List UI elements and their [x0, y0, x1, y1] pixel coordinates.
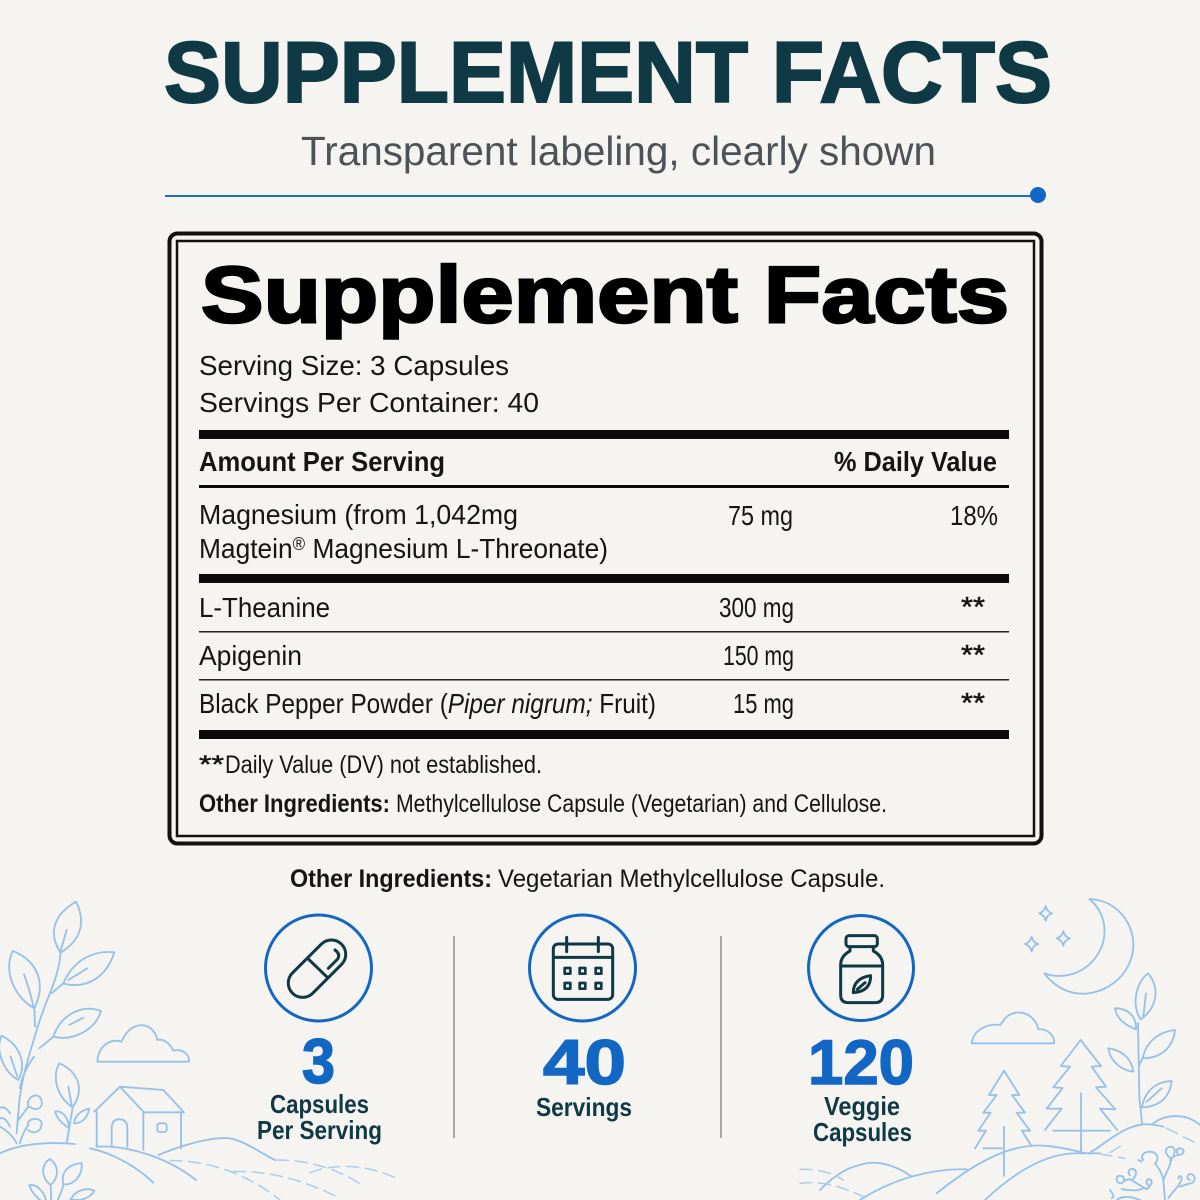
- stat: servings: 40: [543, 1028, 626, 1098]
- main title: SUPPLEMENT FACTS: [164, 25, 1052, 121]
- stat: veggie capsules: [808, 916, 914, 1147]
- row: apigenin: **: [961, 639, 985, 670]
- stat: veggie capsules: 120: [808, 1028, 914, 1098]
- stat: servings: Servings: [536, 1092, 632, 1122]
- illustration: right moon, trees and hills: [800, 899, 1200, 1200]
- icon: capsule: [282, 934, 352, 1003]
- icon: calendar: [553, 937, 613, 999]
- row: l-theanine: L-Theanine: [199, 592, 330, 623]
- other ingredients in label: [199, 790, 887, 818]
- table header: % Daily Value: [834, 446, 997, 477]
- row: magnesium: ®: [293, 534, 305, 554]
- serving information: Servings Per Container: 40: [199, 387, 539, 418]
- row: l-theanine: [199, 591, 985, 623]
- row: magnesium: Magnesium (from 1,042mg: [199, 499, 518, 530]
- stat: veggie capsules: Capsules: [813, 1117, 912, 1147]
- other ingredients in label: Other Ingredients:: [199, 790, 390, 818]
- table header: Amount Per Serving: [199, 446, 445, 477]
- stat: capsules per serving: Per Serving: [257, 1115, 382, 1145]
- serving information: [199, 350, 539, 418]
- other ingredients note: Vegetarian Methylcellulose Capsule.: [498, 865, 885, 893]
- other ingredients in label: Methylcellulose Capsule (Vegetarian) and Cellulose.: [396, 790, 887, 818]
- row: black pepper powder: Black Pepper Powder (Piper nigrum; Fruit): [199, 688, 656, 719]
- row: apigenin: 150 mg: [723, 640, 794, 671]
- row: magnesium: 18%: [950, 500, 998, 531]
- panel: supplement facts label: [170, 234, 1042, 844]
- row: apigenin: Apigenin: [199, 640, 302, 671]
- footnote: **: [199, 751, 224, 779]
- other ingredients note: Other Ingredients:: [290, 865, 492, 893]
- icon: supplement bottle with leaf: [841, 936, 883, 1003]
- row: magnesium: Magtein: [199, 533, 299, 564]
- other ingredients note: [290, 865, 885, 893]
- stat: servings: [530, 915, 636, 1122]
- illustration: right shrub: [1110, 1147, 1195, 1200]
- stat: capsules per serving: [257, 915, 382, 1145]
- row: l-theanine: **: [961, 591, 985, 622]
- row: magnesium: Magnesium L-Threonate): [305, 533, 608, 564]
- stat: veggie capsules: Veggie: [824, 1091, 900, 1121]
- footnote: Daily Value (DV) not established.: [225, 751, 542, 779]
- stat: capsules per serving: Capsules: [270, 1089, 369, 1119]
- serving information: Serving Size: 3 Capsules: [199, 350, 509, 381]
- row: l-theanine: 300 mg: [719, 592, 794, 623]
- row: magnesium: 75 mg: [728, 500, 793, 531]
- stat: capsules per serving: 3: [302, 1027, 335, 1097]
- title divider with dot: [165, 187, 1046, 203]
- row: black pepper powder: 15 mg: [733, 688, 794, 719]
- subtitle: Transparent labeling, clearly shown: [301, 128, 936, 174]
- table header: [199, 446, 997, 477]
- label heading: Supplement Facts: [201, 250, 1009, 339]
- illustration: left plants, house and hills: [0, 902, 400, 1200]
- row: magnesium: [199, 499, 998, 564]
- row: black pepper powder: **: [961, 687, 985, 718]
- row: apigenin: [199, 639, 985, 671]
- row: black pepper powder: [199, 687, 985, 719]
